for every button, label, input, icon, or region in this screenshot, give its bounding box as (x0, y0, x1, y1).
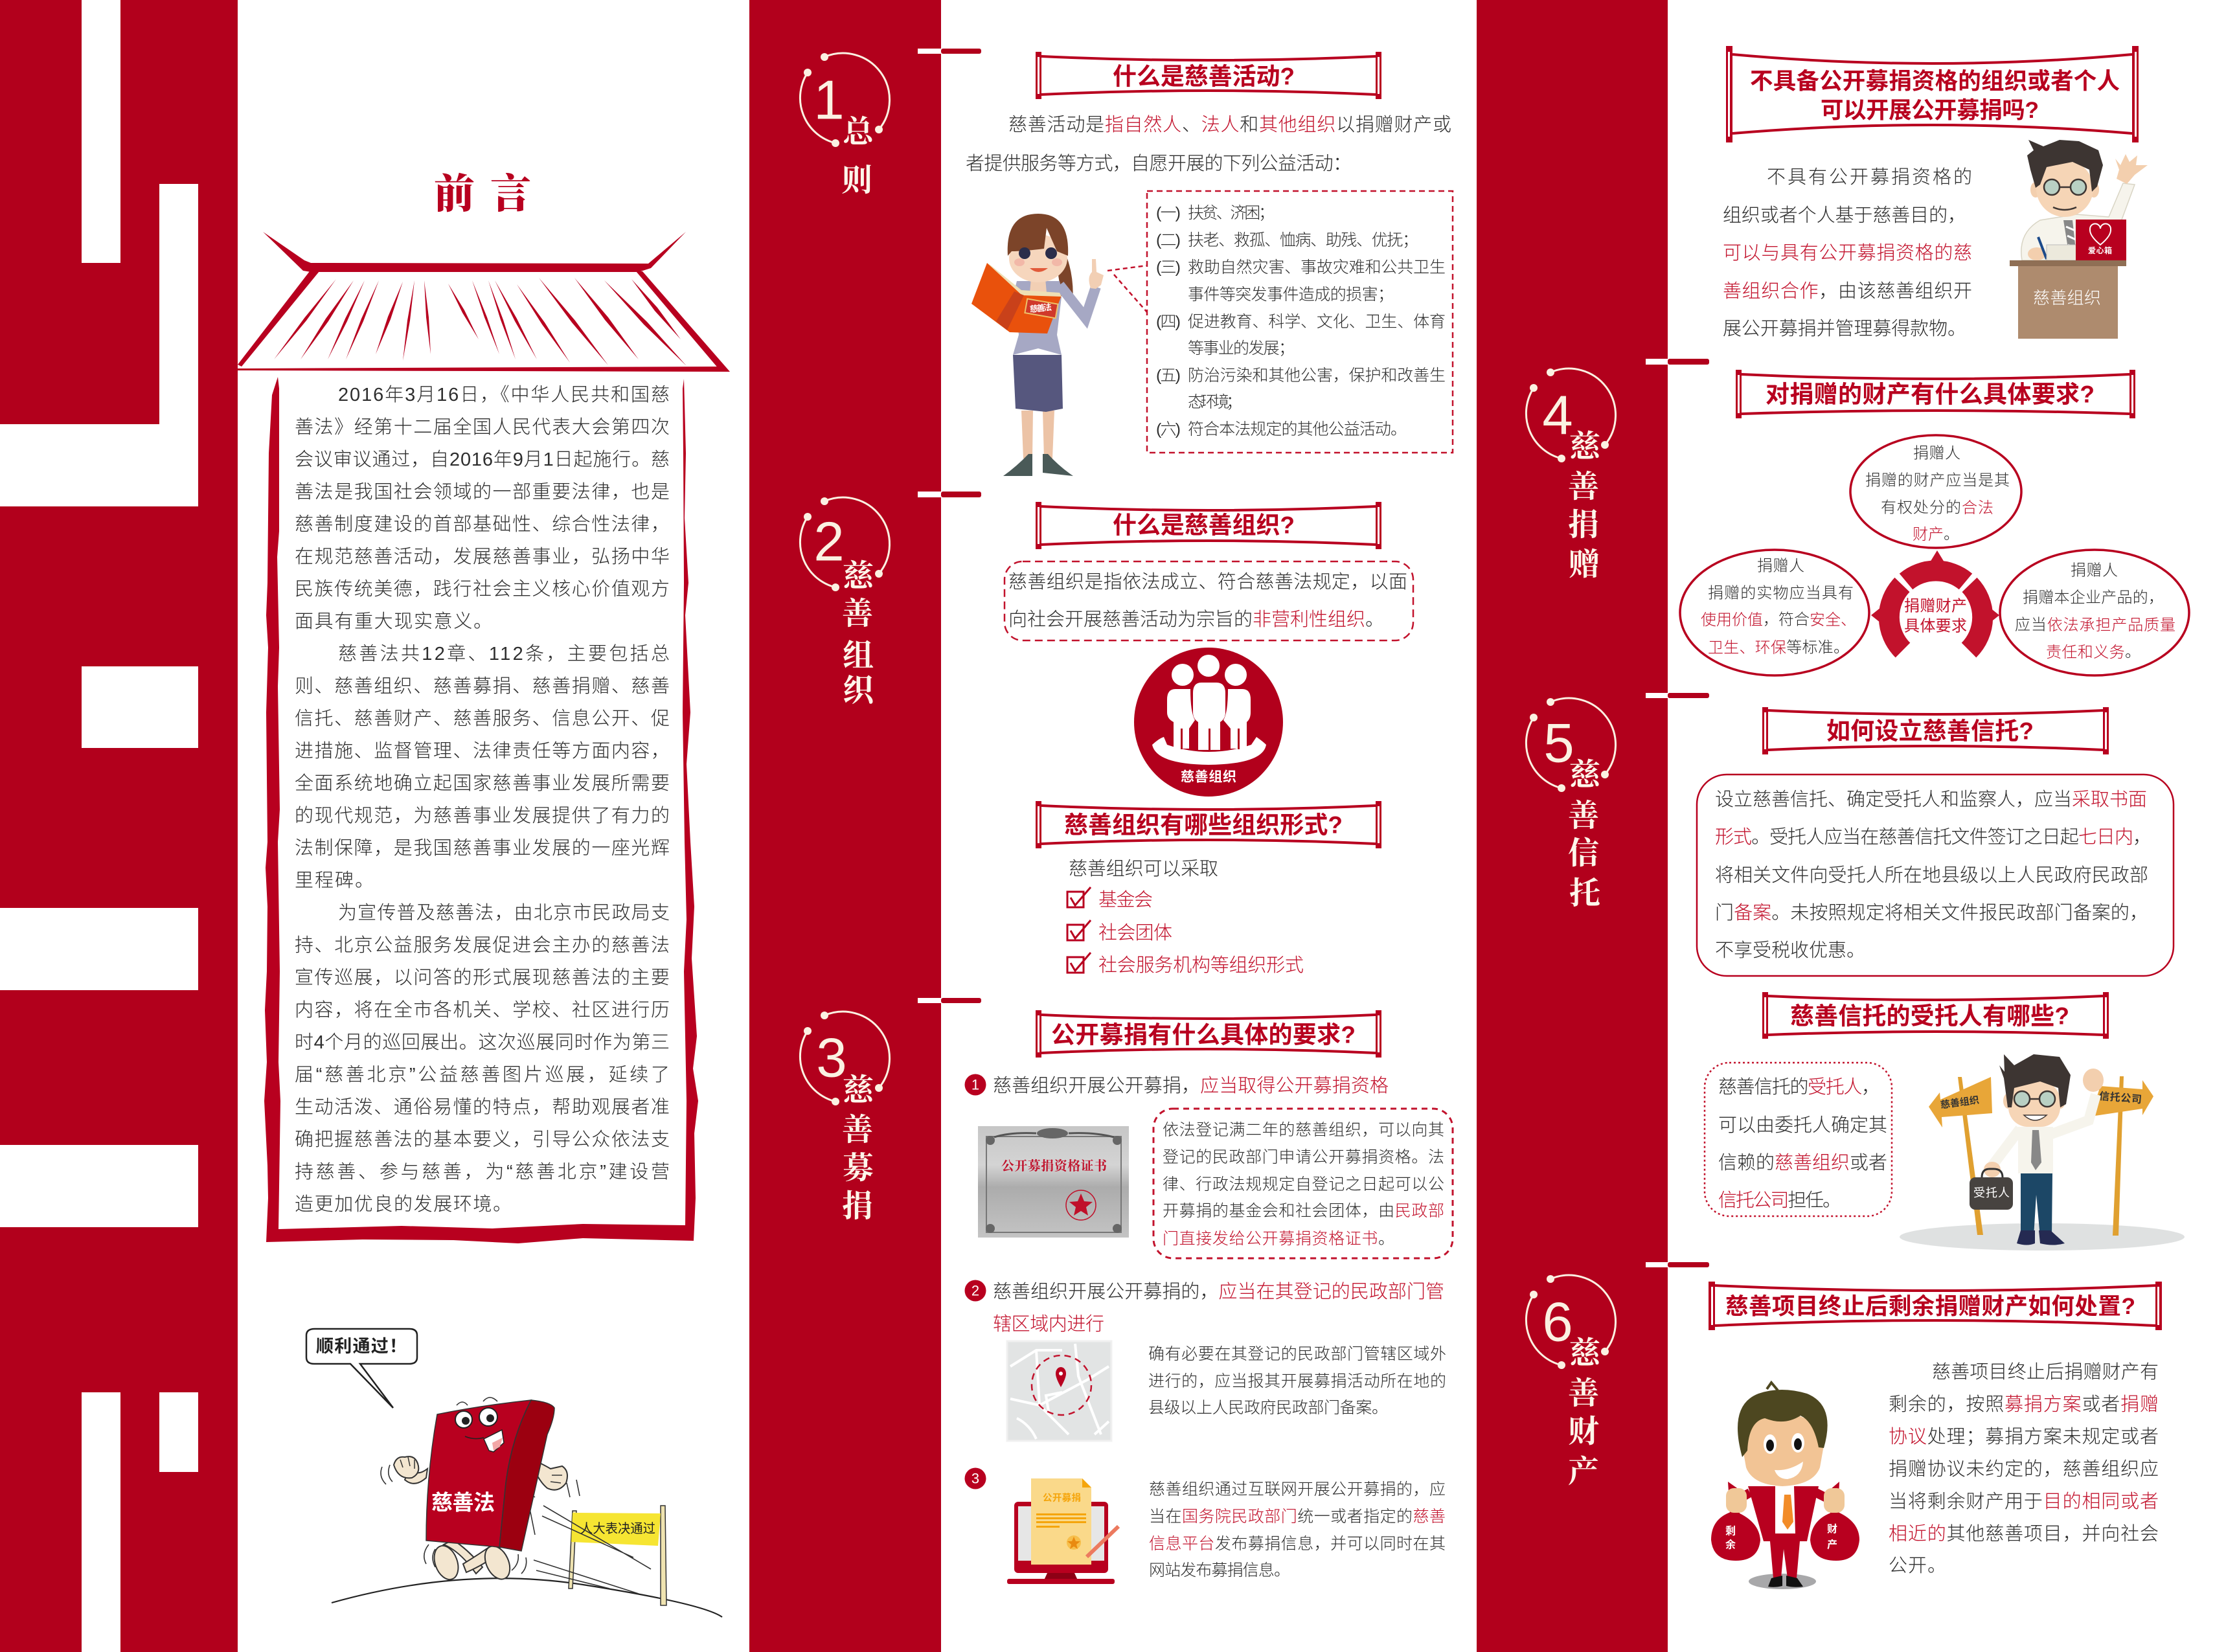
list box: six charity activities: (四) (1156, 313, 1181, 331)
heading banner: remaining property handling (1709, 1282, 2162, 1330)
icon: temple roof (238, 232, 730, 372)
item 1: fundraising qualification heading: 1 (971, 1076, 979, 1093)
text block: preface body: 慈善制度建设的首部基础性、综合性法律， (295, 514, 670, 535)
heading: preface title: 前言 (434, 172, 547, 217)
text block: preface body: 时4个月的巡回展出。这次巡展同时作为第三 (295, 1032, 670, 1053)
callout: how to apply for qualification: 登记的民政部门申请公开募捐资格。法 (1163, 1148, 1444, 1166)
heading banner: what is charity activity: 什么是慈善活动? (1113, 63, 1295, 89)
callout: trustee selection: 慈善信托的受托人， (1718, 1076, 1880, 1098)
text block: outside jurisdiction: 县级以上人民政府民政部门备案。 (1148, 1399, 1388, 1417)
heading banner: requirements for donated property: 对捐赠的财产有什么具体要求? (1766, 381, 2095, 408)
illustration: running law book crossing finish line (306, 1329, 722, 1617)
icon: number ring 6 (1526, 1275, 1616, 1489)
icon: number ring 6: 慈 (1569, 1337, 1602, 1370)
heading banner: what is a charity organization: 什么是慈善组织? (1113, 512, 1295, 539)
icon: number ring 5: 5 (1543, 712, 1574, 775)
icon: number ring 4 (1526, 368, 1616, 582)
icon: number ring 5: 托 (1569, 877, 1600, 911)
panel: trust setup rules: 不享受税收优惠。 (1715, 940, 1865, 961)
heading banner: can unqualified groups raise funds (1726, 46, 2139, 142)
list box: six charity activities: 事件等突发事件造成的损害； (1188, 286, 1394, 304)
list box: six charity activities: (三) (1156, 258, 1181, 277)
panel: right red strip (1477, 0, 1668, 1652)
text block: preface body: 法制保障，是我国慈善事业发展的一座光辉 (295, 837, 670, 859)
illustration: trustee man between signposts: 慈善组织 (1940, 1094, 1980, 1111)
panel: trust setup rules: 门备案。未按照规定将相关文件报民政部门备案的， (1715, 902, 2148, 923)
text block: preface body: 进措施、监督管理、法律责任等方面内容， (295, 740, 670, 762)
icon: charity organization badge: 慈善组织 (1181, 769, 1236, 785)
list box: six charity activities: 防治污染和其他公害，保护和改善生 (1188, 367, 1446, 385)
bubble: donated goods standards: 卫生、环保等标准。 (1708, 639, 1849, 657)
icon: number ring 4: 善 (1568, 470, 1599, 504)
illustration: man at charity desk: 慈善组织 (2033, 288, 2101, 308)
panel: trust setup rules: 将相关文件向受托人所在地县级以上人民政府民政部 (1715, 865, 2148, 886)
callout: definition of charity organization (1005, 561, 1413, 640)
callout: speech bubble (306, 1329, 417, 1408)
text block: online fundraising: 当在国务院民政部门统一或者指定的慈善 (1149, 1508, 1446, 1526)
text block: outside jurisdiction: 进行的，应当报其开展募捐活动所在地的 (1148, 1372, 1446, 1390)
item 3 number badge: 3 (971, 1470, 979, 1487)
callout: how to apply for qualification: 依法登记满二年的慈善组织，可以向其 (1163, 1121, 1444, 1139)
icon: number ring 3: 募 (843, 1151, 874, 1185)
callout: trustee selection: 信托公司担任。 (1718, 1190, 1841, 1211)
bubble: enterprise product liability (2000, 550, 2189, 675)
text block: preface body: 慈善法共12章、112条，主要包括总 (338, 643, 670, 664)
diagram: central ring: 具体要求 (1904, 618, 1967, 635)
checklist: organization forms (1067, 887, 1304, 976)
icon: map with pin (1007, 1341, 1111, 1441)
list box: six charity activities: (一) (1156, 204, 1181, 222)
text block: preface body: 持慈善、参与慈善，为“慈善北京”建设营 (295, 1161, 670, 1182)
text block: handling rule (1889, 1361, 2159, 1576)
icon: number ring 1: 总 (843, 115, 876, 149)
illustration: man holding money bags: 财 (1827, 1523, 1837, 1535)
panel: middle red strip (749, 0, 941, 1652)
diagram: central ring: 捐赠财产 (1904, 597, 1967, 615)
list box: six charity activities: 救助自然灾害、事故灾难和公共卫生 (1188, 258, 1446, 277)
bubble: donor legal property: 有权处分的合法 (1881, 499, 1993, 517)
section 5: charitable trust (1526, 693, 2185, 1250)
heading banner: who can be trustee (1762, 992, 2109, 1039)
text block: outside jurisdiction: 确有必要在其登记的民政部门管辖区域外 (1148, 1345, 1446, 1363)
icon: number ring 4: 赠 (1569, 548, 1600, 582)
callout: how to apply for qualification (1153, 1109, 1453, 1258)
text block: preface body: 宣传巡展，以问答的形式展现慈善法的主要 (295, 967, 670, 988)
list box: six charity activities: 态环境； (1188, 393, 1242, 411)
text block: handling rule: 公开。 (1889, 1556, 1946, 1576)
text block: outside jurisdiction (1148, 1345, 1446, 1417)
icon: number ring 2: 慈 (843, 560, 876, 593)
illustration: trustee man between signposts: 受托人 (1973, 1186, 2010, 1199)
callout: trustee selection (1705, 1063, 1892, 1216)
text block: cooperation rule: 组织或者个人基于慈善目的， (1723, 205, 1966, 226)
list box: six charity activities: 扶贫、济困； (1188, 204, 1275, 222)
text block: preface body: 的现代规范，为慈善事业发展提供了有力的 (295, 805, 670, 826)
heading banner: how to set up a trust (1762, 707, 2109, 754)
callout: how to apply for qualification: 开募捐的基金会和社会团体，由民政部 (1163, 1202, 1444, 1220)
bubble: donor legal property (1850, 435, 2021, 548)
list box: six charity activities: (二) (1156, 231, 1181, 249)
bubble: enterprise product liability: 责任和义务。 (2046, 644, 2141, 661)
heading banner: how to set up a trust: 如何设立慈善信托? (1826, 718, 2034, 745)
tab marker (1646, 693, 1709, 698)
text block: handling rule: 当将剩余财产用于目的相同或者 (1889, 1491, 2159, 1512)
icon: qualification certificate (978, 1126, 1129, 1238)
bubble: donor legal property: 捐赠的财产应当是其 (1865, 471, 2010, 490)
icon: charity organization badge (1134, 648, 1283, 797)
text block: preface body: 确把握慈善法的基本要义，引导公众依法支 (295, 1129, 670, 1150)
list box: six charity activities: (五) (1156, 367, 1181, 385)
text block: preface body: 善法》经第十二届全国人民代表大会第四次 (295, 416, 670, 438)
panel: trust setup rules: 形式。受托人应当在慈善信托文件签订之日起七日内， (1715, 826, 2152, 848)
illustration: trustee man between signposts: 信托公司 (2098, 1091, 2142, 1105)
bubble: enterprise product liability: 捐赠本企业产品的， (2023, 589, 2164, 606)
text block: cooperation rule: 不具有公开募捐资格的 (1767, 166, 1972, 188)
callout: speech bubble: 顺利通过！ (316, 1337, 407, 1356)
illustration: running law book crossing finish line: 慈善法 (431, 1491, 495, 1514)
icon: number ring 1: 1 (813, 70, 845, 131)
illustration: woman holding law book: 慈善法 (1029, 302, 1052, 314)
text block: online fundraising: 慈善组织通过互联网开展公开募捐的，应 (1149, 1480, 1446, 1499)
tab marker (918, 49, 981, 54)
heading banner: what is charity activity (1036, 52, 1381, 99)
panel: left decorative red strip (0, 0, 238, 1652)
text block: preface body: 里程碑。 (295, 870, 374, 891)
illustration: man holding money bags: 余 (1725, 1539, 1736, 1550)
bubble: donated goods standards (1680, 550, 1869, 675)
tab marker (918, 998, 981, 1003)
icon: number ring 5 (1526, 698, 1616, 911)
illustration: running law book crossing finish line: 人大表决通过 (580, 1521, 655, 1536)
list box: six charity activities: 等事业的发展； (1188, 339, 1295, 357)
text block: preface body: 生动活泼、通俗易懂的特点，帮助观展者准 (295, 1096, 670, 1118)
icon: qualification certificate: 公开募捐资格证书 (1001, 1159, 1107, 1173)
callout: how to apply for qualification: 门直接发给公开募捐资格证书。 (1163, 1230, 1394, 1248)
callout: trustee selection: 可以由委托人确定其 (1718, 1115, 1887, 1136)
illustration: trustee man between signposts (1900, 1054, 2185, 1250)
bubble: enterprise product liability: 应当依法承担产品质量 (2015, 617, 2175, 633)
icon: number ring 3: 捐 (842, 1189, 873, 1224)
heading banner: forms of charity organizations: 慈善组织有哪些组织形式? (1064, 812, 1343, 838)
text block: online fundraising: 信息平台发布募捐信息，并可以同时在其 (1149, 1535, 1446, 1553)
text block: preface body: 信托、慈善财产、慈善服务、信息公开、促 (295, 708, 670, 729)
checklist: organization forms: 社会服务机构等组织形式 (1098, 955, 1304, 976)
icon: number ring 3: 慈 (843, 1074, 876, 1107)
heading banner: can unqualified groups raise funds: 可以开展公开募捐吗? (1821, 97, 2039, 123)
icon: number ring 3: 善 (842, 1113, 873, 1148)
section 2: charity organizations (800, 492, 1413, 976)
icon: number ring 2: 织 (843, 673, 876, 708)
heading banner: requirements for donated property (1736, 370, 2135, 418)
illustration: woman holding law book (971, 214, 1147, 476)
icon: number ring 2: 善 (842, 597, 873, 631)
checklist: organization forms: 社会团体 (1098, 922, 1172, 944)
callout: definition of charity organization: 慈善组织是指依法成立、符合慈善法规定，以面 (1008, 571, 1407, 593)
icon: number ring 6: 财 (1568, 1414, 1599, 1449)
icon: number ring 5: 善 (1568, 799, 1599, 833)
frame: rough brush border (264, 377, 698, 1243)
heading banner: public fundraising requirements (1036, 1010, 1381, 1058)
text block: cooperation rule (1723, 166, 1972, 339)
text block: preface body: 民族传统美德，践行社会主义核心价值观方 (295, 578, 670, 600)
text block: preface body (295, 384, 670, 1215)
text block: handling rule: 剩余的，按照募捐方案或者捐赠 (1889, 1394, 2159, 1415)
icon: number ring 5: 慈 (1569, 758, 1602, 793)
heading banner: remaining property handling: 慈善项目终止后剩余捐赠财产如何处置? (1725, 1293, 2135, 1319)
panel: preface (238, 172, 730, 1617)
text block: preface body: 2016年3月16日，《中华人民共和国慈 (338, 384, 670, 405)
icon: number ring 4: 捐 (1568, 508, 1599, 543)
icon: number ring 2 (800, 497, 890, 708)
text block: online fundraising: 网站发布募捐信息。 (1149, 1561, 1290, 1579)
illustration: man holding money bags: 产 (1827, 1539, 1837, 1550)
callout: definition of charity organization: 向社会开展慈善活动为宗旨的非营利性组织。 (1008, 609, 1384, 630)
text block: definition of charity activity: 者提供服务等方式，自愿开展的下列公益活动： (966, 153, 1352, 174)
icon: number ring 3 (800, 1012, 890, 1224)
text block: handling rule: 慈善项目终止后捐赠财产有 (1932, 1361, 2159, 1383)
text block: preface body: 持、北京公益服务发展促进会主办的慈善法 (295, 934, 670, 956)
diagram: central ring (1871, 550, 1999, 650)
section 3: public fundraising (800, 998, 1453, 1584)
text block: preface body: 内容，将在全市各机关、学校、社区进行历 (295, 999, 670, 1021)
list box: six charity activities: (六) (1156, 420, 1181, 438)
icon: computer with fundraising document (1007, 1478, 1119, 1584)
text block: definition of charity activity (966, 114, 1451, 174)
section 1: general provisions (800, 49, 1453, 476)
text block: online fundraising (1149, 1480, 1446, 1579)
section 4: charitable donation (1526, 359, 2189, 675)
text block: preface body: 全面系统地确立起国家慈善事业发展所需要 (295, 773, 670, 794)
tab marker (918, 492, 981, 497)
list box: six charity activities: 符合本法规定的其他公益活动。 (1188, 420, 1407, 438)
icon: number ring 1 (800, 53, 890, 198)
item 2: fundraising within jurisdiction: 辖区域内进行 (993, 1313, 1104, 1335)
item 2: fundraising within jurisdiction: 慈善组织开展公开募捐的，应当在其登记的民政部门管 (993, 1281, 1444, 1302)
list box: six charity activities (1147, 191, 1453, 453)
item 2: fundraising within jurisdiction: 2 (971, 1282, 979, 1299)
illustration: man at charity desk (2010, 140, 2148, 339)
text block: handling rule: 协议处理；募捐方案未规定或者 (1889, 1426, 2159, 1447)
text block: preface body: 届“慈善北京”公益慈善图片巡展，延续了 (295, 1064, 670, 1085)
text block: preface body: 善法是我国社会领域的一部重要法律，也是 (295, 481, 670, 503)
heading banner: what is a charity organization (1036, 502, 1381, 549)
icon: number ring 4: 慈 (1569, 430, 1602, 464)
illustration: man holding money bags: 剩 (1725, 1526, 1736, 1537)
icon: number ring 2: 组 (843, 639, 874, 673)
text block: definition of charity activity: 慈善活动是指自然人、法人和其他组织以捐赠财产或 (1008, 114, 1451, 135)
bubble: donor legal property: 财产。 (1913, 526, 1959, 543)
item 3 number badge (965, 1467, 986, 1489)
bubble: donor legal property: 捐赠人 (1913, 444, 1960, 462)
icon: number ring 6: 善 (1568, 1377, 1599, 1410)
text block: preface body: 面具有重大现实意义。 (295, 611, 492, 632)
callout: how to apply for qualification: 律、行政法规规定自登记之日起可以公 (1163, 1175, 1444, 1194)
text block: cooperation rule: 可以与具有公开募捐资格的慈 (1723, 242, 1972, 264)
heading banner: public fundraising requirements: 公开募捐有什么具体的要求? (1051, 1022, 1356, 1048)
bubble: donated goods standards: 使用价值，符合安全、 (1701, 611, 1856, 628)
panel: trust setup rules (1697, 775, 2174, 976)
illustration: man at charity desk: 爱心箱 (2088, 245, 2112, 255)
icon: number ring 6: 产 (1568, 1454, 1599, 1489)
section: organizations without qualification (1723, 46, 2148, 339)
heading banner: forms of charity organizations (1036, 801, 1381, 848)
icon: number ring 3: 3 (816, 1027, 847, 1089)
icon: number ring 1: 则 (841, 163, 872, 198)
bubble: donated goods standards: 捐赠的实物应当具有 (1708, 584, 1854, 602)
callout: trustee selection: 信赖的慈善组织或者 (1718, 1152, 1887, 1173)
list box: six charity activities: 促进教育、科学、文化、卫生、体育 (1188, 313, 1446, 331)
heading banner: can unqualified groups raise funds: 不具备公开募捐资格的组织或者个人 (1750, 68, 2120, 94)
list box: six charity activities: 扶老、救孤、恤病、助残、优抚； (1188, 231, 1418, 249)
text block: preface body: 为宣传普及慈善法，由北京市民政局支 (338, 902, 670, 923)
text block: handling rule: 捐赠协议未约定的，慈善组织应 (1889, 1458, 2159, 1480)
text block: preface body: 造更加优良的发展环境。 (295, 1194, 512, 1215)
heading banner: who can be trustee: 慈善信托的受托人有哪些? (1790, 1002, 2069, 1030)
item 1: fundraising qualification heading: 慈善组织开展公开募捐，应当取得公开募捐资格 (993, 1075, 1389, 1096)
bubble: donated goods standards: 捐赠人 (1757, 557, 1804, 575)
icon: number ring 4: 4 (1542, 385, 1573, 447)
text block: cooperation rule: 展公开募捐并管理募得款物。 (1723, 318, 1966, 339)
text: organization forms intro: 慈善组织可以采取 (1069, 858, 1218, 879)
icon: computer with fundraising document: 公开募捐 (1043, 1492, 1081, 1504)
checklist: organization forms: 基金会 (1098, 889, 1153, 911)
bubble: enterprise product liability: 捐赠人 (2071, 562, 2118, 579)
panel: trust setup rules: 设立慈善信托、确定受托人和监察人，应当采取书面 (1715, 789, 2147, 810)
text block: preface body: 在规范慈善活动，发展慈善事业，弘扬中华 (295, 546, 670, 567)
section 6: charity property (1526, 1262, 2162, 1589)
icon: number ring 6: 6 (1542, 1291, 1573, 1353)
item 2: fundraising within jurisdiction (965, 1280, 1444, 1335)
illustration: man holding money bags (1711, 1383, 1859, 1589)
text block: preface body: 则、慈善组织、慈善募捐、慈善捐赠、慈善 (295, 675, 670, 697)
text block: preface body: 会议审议通过，自2016年9月1日起施行。慈 (295, 449, 670, 470)
text block: handling rule: 相近的其他慈善项目，并向社会 (1889, 1523, 2159, 1545)
icon: number ring 5: 信 (1568, 837, 1599, 870)
text block: cooperation rule: 善组织合作，由该慈善组织开 (1723, 280, 1972, 302)
tab marker (1646, 359, 1709, 365)
icon: number ring 2: 2 (813, 512, 845, 572)
tab marker (1646, 1262, 1709, 1267)
